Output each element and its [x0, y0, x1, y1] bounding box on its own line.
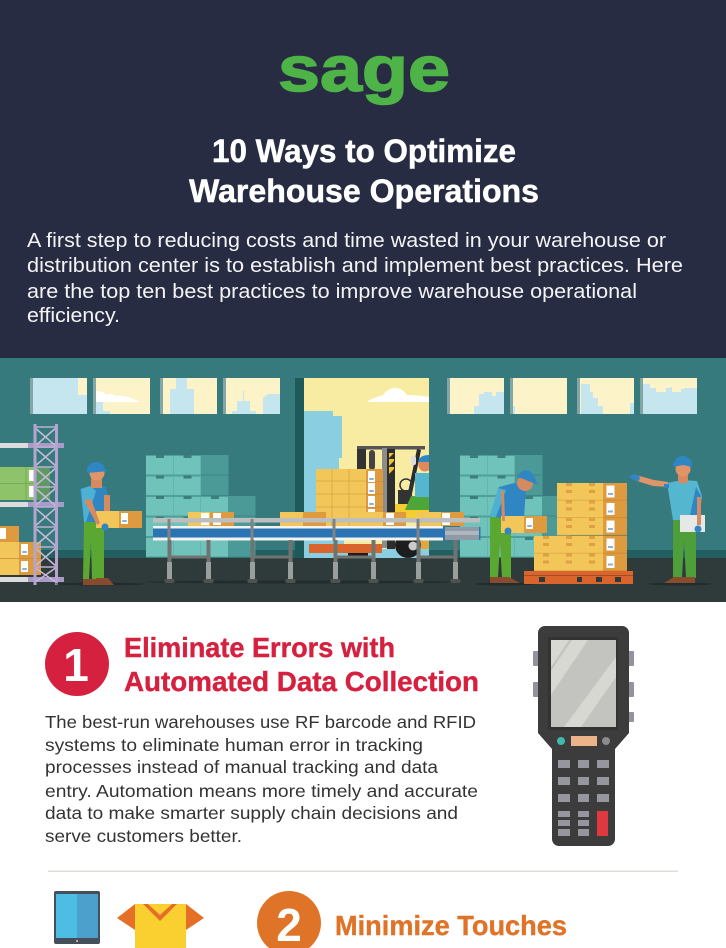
- heading 1: Eliminate Errors with: [124, 632, 395, 663]
- number badge 1: 1: [63, 639, 89, 691]
- body text 1: systems to eliminate human error in tracking: [45, 735, 423, 755]
- heading 1: [124, 632, 479, 697]
- title: 10 Ways to Optimize: [212, 133, 516, 169]
- body text 1: entry. Automation means more timely and accurate: [45, 781, 478, 801]
- intro text: A first step to reducing costs and time wasted in your warehouse or: [27, 229, 666, 252]
- number badge 1: [45, 632, 109, 696]
- storage rack with boxes: [0, 424, 64, 585]
- worker holding box: [55, 462, 145, 586]
- intro text: [27, 229, 683, 327]
- conveyor belt: [145, 518, 480, 584]
- icon: tablet: [54, 891, 100, 944]
- body text 1: serve customers better.: [45, 826, 242, 846]
- intro text: are the top ten best practices to improve warehouse operational: [27, 280, 637, 303]
- title: Warehouse Operations: [189, 173, 539, 209]
- warehouse door with forklift: [295, 378, 432, 558]
- teal box stack left: [146, 455, 256, 558]
- warehouse illustration: [0, 358, 726, 602]
- title: [189, 133, 539, 209]
- conveyor boxes: [188, 512, 464, 526]
- intro text: efficiency.: [27, 304, 120, 327]
- worker pointing with clipboard: [629, 456, 712, 586]
- section 2: [54, 891, 567, 948]
- teal box stack right: [460, 455, 570, 558]
- pallet box stack: [524, 483, 633, 584]
- windows left: [30, 378, 280, 414]
- heading 1: Automated Data Collection: [124, 666, 479, 697]
- body text 1: [45, 712, 478, 846]
- number badge 2: [257, 891, 321, 948]
- worker bending with box: [475, 470, 547, 586]
- heading 2: Minimize Touches: [335, 910, 567, 941]
- body text 1: processes instead of manual tracking and data: [45, 757, 438, 777]
- body text 1: data to make smarter supply chain decisions and: [45, 803, 458, 823]
- section 1: [45, 626, 634, 846]
- windows right: [447, 378, 697, 414]
- header panel: [0, 0, 726, 358]
- icon: t-shirt: [117, 904, 204, 948]
- pallet: [524, 571, 633, 584]
- sage logo: sage: [278, 33, 450, 105]
- icon: RF barcode scanner: [533, 626, 634, 846]
- forklift load boxes: [309, 469, 383, 556]
- intro text: distribution center is to establish and implement best practices. Here: [27, 254, 683, 277]
- body text 1: The best-run warehouses use RF barcode and RFID: [45, 712, 476, 732]
